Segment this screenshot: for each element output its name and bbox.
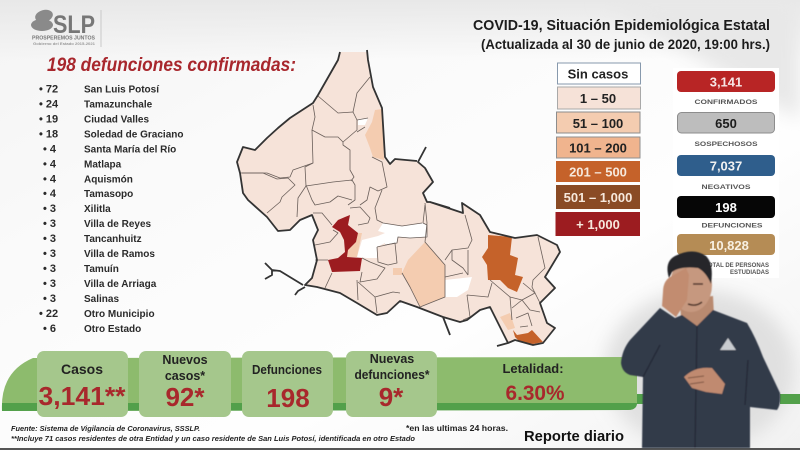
deaths by municipality list: • 4 xyxy=(43,158,57,170)
source notes xyxy=(11,424,415,443)
stat: confirmados xyxy=(677,71,775,106)
heading: deaths list: 198 defunciones confirmadas: xyxy=(47,55,296,76)
legend item: Sin casos: Sin casos xyxy=(568,66,628,82)
deaths by municipality list xyxy=(39,84,183,335)
deaths by municipality list: • 4 xyxy=(43,144,57,156)
stat: confirmados: 3,141 xyxy=(710,74,742,90)
logo: SLP Prosperemos Juntos xyxy=(31,8,102,47)
panel: case totals xyxy=(673,68,779,278)
legend item: +1,000: + 1,000 xyxy=(576,217,620,232)
hair xyxy=(667,252,712,284)
card: defunciones: Defunciones xyxy=(252,363,322,377)
logo: SLP Prosperemos Juntos: PROSPEREMOS JUNTOS xyxy=(32,36,96,42)
deaths by municipality list: Otro Municipio xyxy=(84,309,155,320)
legend item: +1,000 xyxy=(556,212,640,236)
deaths by municipality list: • 3 xyxy=(43,233,56,245)
white municipalities (no cases) xyxy=(357,118,472,297)
card: casos xyxy=(37,351,128,417)
legend item: 101–200 xyxy=(556,137,640,158)
title xyxy=(473,17,770,52)
neck xyxy=(680,296,714,328)
deaths by municipality list: San Luis Potosí xyxy=(84,84,160,96)
raised hand xyxy=(662,268,689,317)
deaths by municipality list: • 3 xyxy=(43,263,56,275)
deaths by municipality list: • 18 xyxy=(39,128,58,140)
legend item: 501–1,000 xyxy=(556,185,640,209)
stat: defunciones: 198 xyxy=(715,200,737,215)
legend item: 501–1,000: 501 – 1,000 xyxy=(564,190,632,205)
deaths by municipality list: Tamuín xyxy=(84,264,119,275)
stat: letalidad: Letalidad: xyxy=(502,361,564,376)
deaths by municipality list: • 24 xyxy=(39,98,59,110)
card: nuevas defunciones xyxy=(346,351,437,417)
label: reporte diario: Reporte diario xyxy=(524,429,624,445)
stat: sospechosos: 650 xyxy=(715,116,737,131)
stat: confirmados: CONFIRMADOS xyxy=(694,100,758,106)
stat: sospechosos: SOSPECHOSOS xyxy=(694,142,758,148)
stat: total de personas estudiadas: 10,828 xyxy=(709,238,749,253)
card: nuevos casos xyxy=(139,351,231,417)
shirt logo xyxy=(720,338,736,350)
card: casos: 3,141** xyxy=(38,381,126,411)
card: defunciones xyxy=(242,351,333,417)
card: nuevos casos: Nuevos xyxy=(162,353,208,367)
logo: SLP Prosperemos Juntos: SLP xyxy=(53,11,95,39)
deaths by municipality list: Villa de Ramos xyxy=(84,249,155,260)
deaths by municipality list: Santa María del Río xyxy=(84,144,176,156)
stat: sospechosos xyxy=(678,112,774,148)
deaths by municipality list: Tamazunchale xyxy=(84,100,153,110)
deaths by municipality list: • 3 xyxy=(43,248,56,260)
head xyxy=(670,258,712,312)
title: (Actualizada al 30 de junio de 2020, 19:00 hrs.) xyxy=(481,36,770,52)
deaths by municipality list: • 4 xyxy=(43,188,57,200)
source notes: Fuente: Sistema de Vigilancia de Coronavirus, SSSLP. xyxy=(11,424,200,433)
chest hand xyxy=(684,368,725,394)
deaths by municipality list: • 3 xyxy=(43,293,56,305)
deaths by municipality list: Villa de Arriaga xyxy=(84,279,157,290)
orange municipalities xyxy=(482,235,543,344)
deaths by municipality list: • 6 xyxy=(43,323,56,335)
card: nuevas defunciones: Nuevas xyxy=(370,352,414,366)
legend item: 101–200: 101 – 200 xyxy=(569,140,627,156)
stat: total de personas estudiadas xyxy=(677,234,775,276)
card: nuevas defunciones: defunciones* xyxy=(354,368,430,382)
legend: case ranges xyxy=(556,63,640,236)
logo: SLP Prosperemos Juntos: Gobierno del Estado 2015-2021 xyxy=(33,41,96,46)
stat: total de personas estudiadas: ESTUDIADAS xyxy=(730,270,769,276)
card: casos: Casos xyxy=(61,361,103,377)
deaths by municipality list: Villa de Reyes xyxy=(84,219,152,230)
eyes and mouth xyxy=(688,284,703,305)
legend item: 1–50: 1 – 50 xyxy=(580,91,616,106)
stat: negativos: 7,037 xyxy=(710,158,742,174)
stat: letalidad xyxy=(502,361,565,405)
stat: letalidad: 6.30% xyxy=(506,382,565,405)
light orange municipalities xyxy=(347,109,515,330)
deaths by municipality list: • 19 xyxy=(39,114,58,126)
legend item: 201–500 xyxy=(556,161,640,182)
footnote: last 24 hours: *en las ultimas 24 horas. xyxy=(406,423,508,433)
municipal borders xyxy=(240,77,545,327)
deaths by municipality list: Salinas xyxy=(84,294,119,305)
deaths by municipality list: Aquismón xyxy=(84,174,133,186)
deaths by municipality list: • 4 xyxy=(43,174,57,186)
legend item: 51–100: 51 – 100 xyxy=(573,116,623,131)
stat: defunciones: DEFUNCIONES xyxy=(702,224,762,230)
legend item: 201–500: 201 – 500 xyxy=(569,164,627,180)
deaths by municipality list: Soledad de Graciano xyxy=(84,130,183,140)
legend item: 51–100 xyxy=(556,112,640,133)
state outline xyxy=(237,50,560,346)
deaths by municipality list: Matlapa xyxy=(84,160,122,170)
deaths by municipality list: • 72 xyxy=(39,84,58,96)
deaths by municipality list: • 22 xyxy=(39,308,58,320)
source notes: **Incluye 71 casos residentes de otra Entidad y un caso residente de San Luis Potosí, identificada en otro Estado xyxy=(11,434,415,443)
shirt xyxy=(621,308,780,448)
card: nuevos casos: 92* xyxy=(165,382,205,412)
choropleth map of San Luis Potosí xyxy=(237,50,560,346)
title: COVID-19, Situación Epidemiológica Estatal xyxy=(473,17,770,34)
deaths by municipality list: Tamasopo xyxy=(84,189,133,200)
dark red municipality: San Luis Potosí xyxy=(328,215,362,272)
deaths by municipality list: • 3 xyxy=(43,278,56,290)
card: nuevos casos: casos* xyxy=(165,369,205,383)
sign language interpreter xyxy=(621,252,780,448)
stat: negativos: NEGATIVOS xyxy=(702,185,750,191)
deaths by municipality list: Xilitla xyxy=(84,204,111,215)
card: defunciones: 198 xyxy=(266,383,310,413)
stat: total de personas estudiadas: TOTAL DE PERSONAS xyxy=(704,263,769,269)
card: nuevas defunciones: 9* xyxy=(379,382,404,412)
deaths by municipality list: • 3 xyxy=(43,218,56,230)
deaths by municipality list: Otro Estado xyxy=(84,324,141,335)
stat: negativos xyxy=(677,155,775,191)
green summary band xyxy=(2,351,800,417)
deaths by municipality list: Tancanhuitz xyxy=(84,234,142,245)
legend item: 1–50 xyxy=(558,87,640,109)
stat: defunciones xyxy=(677,196,775,230)
legend item: Sin casos xyxy=(558,63,640,84)
deaths by municipality list: Ciudad Valles xyxy=(84,114,149,126)
deaths by municipality list: • 3 xyxy=(43,203,56,215)
